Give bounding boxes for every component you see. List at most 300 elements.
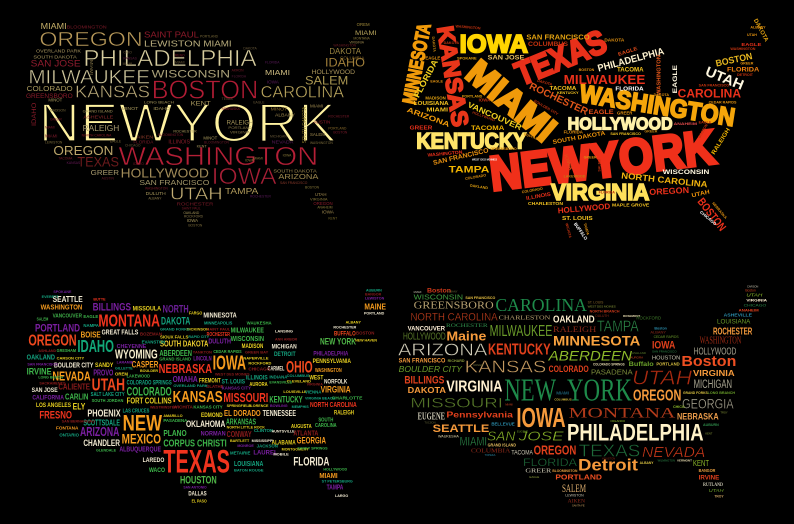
group: tiny filler words: NAMPA (83, 323, 100, 328)
group: tiny filler words: INDIANA (269, 375, 288, 380)
group: medium city words: UTAH (632, 368, 693, 390)
group: medium city words: TAMPA (597, 318, 639, 335)
group: tiny filler words: IDAHO (133, 162, 144, 166)
group: medium city words: COLORADO (127, 384, 172, 398)
group: medium city words: NORTH CAROLINA (621, 170, 709, 189)
group: tiny filler words: MIAMI (253, 156, 263, 160)
group: medium city words: Maine (446, 329, 486, 343)
group: medium city words: LAREDO (143, 457, 164, 464)
group: tiny filler words: SAN FRANCISCO (280, 181, 308, 185)
group: medium city words: WISCONSIN (152, 68, 230, 80)
group: medium city words: RALEIGH (553, 324, 596, 334)
group: medium city words: BANGOR (699, 468, 716, 473)
group: tiny filler words: WASHINGTON (333, 44, 357, 48)
group: medium city words: PENNSYLVANIA (313, 358, 351, 365)
group: medium city words: PHILADELPHIA (313, 351, 349, 357)
group: tiny filler words: KENT (328, 216, 337, 220)
group: medium city words: CARMEL (268, 366, 285, 372)
group: medium city words: ALABAMA (272, 440, 296, 447)
group: medium city words: MILWAUKEE (490, 323, 552, 340)
group: medium city words: MINNEAPOLIS (204, 320, 232, 325)
group: medium city words: EAGLE (589, 109, 614, 116)
group: medium city words: VIRGINIA (693, 368, 735, 378)
group: medium city words: EUGENE (418, 411, 445, 422)
group: tiny filler words: ONTARIO (59, 433, 80, 438)
group: tiny filler words: COLUMBUS (287, 373, 310, 378)
group: medium city words: SAN JOSE (488, 54, 525, 61)
group: tiny filler words: ROCKFORD (184, 215, 204, 219)
group: tiny filler words: BOZEMAN (140, 331, 162, 336)
group: tiny filler words: ROSEMONT (623, 314, 640, 318)
group: tiny filler words: SACRAMENTO (39, 382, 66, 386)
group: tiny filler words: MONROE (237, 444, 254, 448)
group: medium city words: ANAHEIM (674, 121, 698, 126)
group: medium city words: AUGUSTA (291, 424, 312, 430)
group: medium city words: UTAH (691, 190, 710, 199)
group: tiny filler words: MIAMI (45, 134, 58, 139)
group: medium city words: RUTLAND (703, 482, 723, 488)
group: tiny filler words: CHICO (673, 405, 685, 409)
group: medium city words: BUFFALO (573, 222, 589, 241)
group: medium city words: CARLIN (65, 391, 88, 401)
word: KANSAS: KANSAS (173, 389, 223, 406)
group: medium city words: EAGLE (617, 46, 639, 58)
word: ARIZONA: ARIZONA (398, 339, 488, 359)
group: medium city words: EAGLE (741, 42, 762, 48)
group: medium city words: TAMPA (449, 165, 490, 175)
group: medium city words: BOULDER CITY (54, 361, 93, 370)
word: IOWA: IOWA (213, 352, 246, 374)
group: medium city words: ALBUQUERQUE (119, 444, 161, 453)
group: medium city words: SOUTH (318, 417, 333, 423)
group: medium city words: FLORIDA (293, 454, 330, 468)
group: tiny filler words: COLUMBIA (340, 55, 365, 60)
group: tiny filler words: IOWA (479, 98, 491, 103)
group: tiny filler words: BOSTON (305, 185, 320, 189)
group: tiny filler words: SAINT PAUL (207, 326, 231, 331)
group: medium city words: TACOMA (511, 450, 533, 457)
group: tiny filler words: GRAND FORKS (683, 391, 709, 395)
group: medium city words: MADISON (242, 344, 263, 350)
group: tiny filler words: MONTGOMERY (282, 447, 309, 451)
group: medium city words: LOUISIANA (717, 319, 751, 326)
group: tiny filler words: WEST DES MOINES (588, 305, 616, 309)
group: tiny filler words: PORTLAND (200, 34, 219, 38)
group: medium city words: TROY (714, 494, 724, 499)
group: medium city words: FARGO (189, 310, 202, 316)
group: tiny filler words: OVERLAND PARK (173, 383, 208, 388)
group: tiny filler words: LONG BRANCH (708, 391, 735, 395)
group: tiny filler words: KANSAS CITY (193, 405, 223, 410)
group: tiny filler words: HUNTSVILLE (272, 430, 295, 434)
group: medium city words: MIAMI (310, 103, 323, 108)
group: medium city words: ANAHEIM (739, 307, 759, 312)
word: HOLLYWOOD: HOLLYWOOD (568, 113, 673, 133)
word: WASHINGTON: WASHINGTON (118, 141, 318, 171)
group: medium city words: ABERDEEN (548, 347, 633, 363)
group: medium city words: ILLINOIS (246, 374, 268, 381)
word: Detroit: Detroit (578, 455, 639, 474)
group: medium city words: RALEIGH (227, 120, 253, 126)
group: medium city words: DAKOTA (329, 47, 362, 56)
group: medium city words: FRESNO (39, 410, 72, 422)
group: medium city words: RALEIGH (83, 124, 120, 133)
group: tiny filler words: MIAMI (45, 125, 55, 129)
group: tiny filler words: BUFFALO (523, 132, 541, 142)
group: tiny filler words: OREGON (313, 201, 333, 206)
group: medium city words: GREER (91, 168, 119, 177)
group: tiny filler words: UTAH (747, 33, 757, 37)
group: medium city words: AIKEN (137, 134, 154, 140)
word: OREGON: OREGON (39, 28, 143, 51)
group: medium city words: MIAMI (41, 22, 67, 31)
group: medium city words: CHANDLER (83, 438, 120, 448)
word: OREGON: OREGON (28, 332, 77, 349)
group: tiny filler words: MISSISSIPPI (252, 439, 273, 443)
group: tiny filler words: CHARLOTTE (332, 395, 363, 401)
group: medium city words: DAKOTA (408, 385, 447, 395)
group: tiny filler words: SAN FRANCISCO (699, 84, 729, 88)
group: medium city words: TAMPA (327, 482, 344, 491)
group: tiny filler words: VIRGINIA (310, 197, 328, 202)
group: tiny filler words: VERMONT (677, 458, 692, 462)
group: tiny filler words: ALBANY (650, 330, 666, 335)
group: medium city words: IOWA (652, 340, 675, 352)
group: medium city words: WISCONSIN (663, 169, 710, 176)
group: tiny filler words: NEBRASKA (222, 107, 241, 111)
group: medium city words: NORMAN (201, 430, 226, 437)
group: tiny filler words: MIAMI (505, 402, 513, 406)
group: medium city words: DULUTH (208, 337, 231, 346)
group: medium city words: GREER (525, 469, 551, 475)
group: medium city words: Buffalo (629, 362, 654, 368)
group: medium city words: KENTUCKY (557, 91, 579, 95)
group: medium city words: LAS CRUCES (123, 409, 150, 415)
group: medium city words: VANCOUVER (408, 325, 445, 332)
group: medium city words: SCOTTSDALE (83, 417, 120, 427)
word: NEW YORK (504, 372, 632, 407)
group: medium city words: MAINE (364, 302, 386, 312)
group: medium city words: PHILADELPHIA (597, 46, 665, 75)
group: medium city words: MIAMI (89, 60, 94, 75)
group: medium city words: DAKOTA (604, 38, 625, 43)
group: medium city words: ARKANSAS (226, 418, 256, 427)
group: tiny filler words: BLOOMINGTON (158, 133, 184, 137)
group: medium city words: MIAMI (460, 434, 487, 448)
group: medium city words: FLORIDA (133, 139, 154, 145)
group: tiny filler words (45, 22, 371, 228)
group: medium city words: ATLANTA (293, 428, 319, 437)
group: medium city words: TACOMA (471, 125, 505, 132)
group: medium city words: SALT LAKE CITY (91, 392, 125, 398)
word: KANSAS: KANSAS (432, 24, 474, 129)
group: tiny filler words: KANSAS CITY (222, 385, 251, 390)
group: medium city words: WEST (309, 374, 323, 381)
group: tiny filler words: RENO (175, 54, 185, 58)
word: PHILADELPHIA: PHILADELPHIA (83, 45, 257, 71)
group: medium city words: ILLINOIS (526, 192, 552, 202)
group: medium city words: OREGON (633, 387, 681, 404)
group: tiny filler words: GREER (617, 110, 633, 115)
group: medium city words: KENT (197, 145, 207, 149)
group: tiny filler words: LARGO (335, 494, 348, 498)
group: medium city words: SAN FRANCISCO (526, 32, 590, 41)
group: medium city words: ABERDEEN (159, 348, 192, 358)
group: medium city words: BILLINGS (404, 375, 444, 387)
group: medium city words: TACOMA (550, 86, 576, 92)
group: tiny filler words: ANAHEIM (317, 205, 333, 209)
group: medium city words: WASHINGTON (315, 368, 342, 374)
group: medium city words: OAKLAND (553, 315, 595, 326)
word: WASHINGTON: WASHINGTON (578, 80, 737, 132)
group: tiny filler words: METAIRIE (230, 451, 250, 456)
group: medium city words: ARIZONA (406, 105, 452, 129)
group: medium city words: WASHINGTON (427, 150, 463, 158)
group: medium city words: NORFOLK (324, 379, 347, 386)
word: NEW YORK: NEWYORK (487, 120, 718, 202)
group: tiny filler words: IOWA (187, 218, 198, 223)
group: tiny filler words: SAN FRANCISCO (27, 362, 58, 366)
group: tiny filler words: HOLLYWOOD (323, 467, 348, 471)
group: tiny filler words: OREM (115, 371, 128, 376)
group: tiny filler words: DAKOTA (431, 36, 436, 52)
group: tiny filler words: HOUSTON (602, 456, 615, 460)
group: tiny filler words: SANDY SPRINGS (297, 446, 328, 450)
group: tiny filler words: BOSTON (356, 331, 374, 336)
group: medium city words: UTAH (746, 293, 763, 298)
group: tiny filler words: HOLLYWOOD (472, 111, 496, 123)
group: tiny filler words: IOWA (267, 79, 280, 84)
group: tiny filler words: DAKOTA (243, 46, 258, 50)
word: KANSAS: KANSAS (465, 357, 546, 377)
word: PHILADELPHIA: PHILADELPHIA (567, 419, 704, 446)
group: medium city words: NORTH CAROLINA (410, 311, 498, 323)
group: tiny filler words: BOSTON (333, 130, 348, 134)
group: medium city words: OMAHA (173, 375, 198, 384)
word: NEW MEXICO (122, 410, 162, 447)
group: tiny filler words: TROY (720, 411, 728, 415)
group: medium city words: GEORGIA (682, 396, 734, 412)
word: Boston: Boston (681, 354, 736, 370)
group: medium city words: ROCHESTER (173, 129, 197, 133)
group: medium city words: VIRGINIA (321, 385, 351, 395)
group: tiny filler words: WASHINGTON (730, 47, 756, 51)
group: medium city words: ILLINOIS (168, 139, 190, 145)
group: medium city words: MINNESOTA (203, 311, 237, 320)
group: medium city words: RALEIGH (334, 410, 354, 417)
group: tiny filler words: MEMPHIS (292, 405, 309, 409)
group: medium city words: EL DORADO (224, 408, 261, 418)
word: VIRGINIA: VIRGINIA (551, 179, 649, 205)
group: medium city words: SOUTH DAKOTA (273, 169, 317, 175)
word: MIAMI: MIAMI (459, 52, 564, 150)
panel: multicolour condensed word map, bottom left (27, 288, 386, 504)
group: tiny filler words: TOPEKA (485, 453, 496, 457)
group: tiny filler words: BUTTE (93, 297, 106, 301)
group: medium city words: SOUTH DAKOTA (33, 54, 78, 59)
group: medium city words: BOULDER CITY (399, 365, 463, 374)
group: medium city words: Pennsylvania (446, 410, 513, 420)
word: IOWA: IOWA (212, 163, 278, 189)
group: medium city words: SAN ANTONIO (183, 485, 207, 490)
group: medium city words: GRAND ISLAND (159, 356, 192, 361)
panel: mixed typeface green, orange and red word map, bottom right (398, 284, 767, 508)
group: medium city words: HOLLYWOOD (121, 165, 209, 180)
group: tiny filler words: DAKOTA (654, 93, 669, 97)
word: NEW YORK: NEWYORK (38, 92, 337, 154)
group: tiny filler words: JACKSON (257, 444, 278, 449)
group: medium city words: ST. LOUIS (222, 379, 245, 386)
group: medium city words: WISCONSIN (414, 292, 463, 301)
group: tiny filler words: ST. LOUIS (588, 301, 604, 305)
group: tiny filler words: GILLETTE (115, 366, 133, 370)
group: tiny filler words: WASHINGTON (455, 24, 481, 31)
group: medium city words: VANCOUVER (466, 100, 523, 132)
group: tiny filler words: ASHLAND (38, 349, 57, 353)
group: medium city words: DULUTH (146, 191, 166, 196)
group: tiny filler words: EUGENE (517, 430, 528, 434)
group: tiny filler words: MIAMI (414, 290, 422, 294)
group: tiny filler words: KANSAS (67, 161, 81, 165)
group: medium city words: TAMPA (225, 186, 259, 196)
word: NEW MEXICO: MEXICO (122, 431, 161, 447)
group: tiny filler words: SAN BERNARDINO (62, 420, 95, 424)
group: medium city words: BELLEVUE (491, 421, 515, 427)
group: medium city words: DETROIT (274, 351, 296, 358)
group: medium city words: SALEM (305, 73, 348, 87)
group: medium city words: MINOT (271, 107, 287, 112)
group: medium city words: OAKLAND (27, 353, 55, 362)
group: medium city words: WASHINGTON (41, 303, 82, 312)
group: tiny filler words: WAUKESHA (438, 435, 459, 439)
group: tiny filler words: CHEYENNE (117, 344, 147, 350)
group: tiny filler words: BATON ROUGE (234, 467, 264, 472)
group: tiny filler words: BANGOR (365, 292, 382, 296)
group: tiny filler words: COLUMBUS (554, 397, 572, 401)
group: tiny filler words: PORTLAND (364, 311, 385, 315)
group: medium city words: ARIZONA (80, 425, 119, 439)
group: medium city words: BOSTON (715, 51, 753, 69)
group: medium city words: WASHINGTON (700, 336, 741, 347)
group: tiny filler words: EAGLE (425, 55, 440, 60)
group: tiny filler words: NORTH CAROLINA (82, 134, 112, 138)
group: tiny filler words: AUBURN (703, 423, 719, 427)
group: medium city words: ASHEVILLE (724, 312, 752, 317)
group: tiny filler words: EAGLE (699, 120, 712, 124)
group: tiny filler words: WICHITA (564, 223, 572, 239)
group: medium city words: VANCOUVER (53, 314, 82, 320)
group: medium city words: FLORIDA (615, 87, 644, 93)
group: medium city words: KENTUCKY (269, 395, 303, 405)
group: medium city words: CHARLESTON (499, 314, 551, 321)
group: tiny filler words: VIRGINIA BEACH (305, 396, 335, 400)
group: tiny filler words: ALBANY (346, 321, 361, 325)
group: tiny filler words: OLATHE (206, 384, 224, 389)
group: medium city words: CHICAGO (744, 302, 766, 307)
group: tiny filler words: TEXAS (222, 97, 233, 101)
group: medium city words (399, 289, 767, 505)
group: medium city words: MIAMI (319, 471, 338, 480)
group: tiny filler words: MOBILE (273, 451, 289, 456)
group: medium city words (27, 294, 386, 504)
group: tiny filler words: DICKINSON (187, 326, 209, 331)
group: medium city words: LEWISTON (565, 493, 584, 498)
group: tiny filler words: LARAMIE (117, 361, 134, 365)
group: tiny filler words: ROCHESTER (333, 326, 357, 330)
group: tiny filler words: SPRINGFIELD (227, 404, 252, 408)
word: MINNESOTA: MINNESOTA (553, 332, 640, 348)
group: medium city words: ROCHESTER (713, 327, 752, 338)
group: tiny filler words: TAMPA (583, 223, 590, 236)
group: medium city words: COLUMBUS (528, 42, 568, 48)
group: tiny filler words: EVANSVILLE (269, 381, 293, 385)
group: tiny filler words: ALBANY (148, 196, 162, 200)
group: tiny filler words: MINOT (48, 98, 63, 103)
group: medium city words: RALEIGH (711, 127, 732, 156)
group: medium city words: GREENSBORO (26, 93, 73, 100)
group: medium city words: GREENSBORO (414, 301, 494, 312)
group: tiny filler words: UTAH (315, 192, 326, 197)
group: tiny filler words: GREER (740, 61, 754, 65)
group: tiny filler words: FLORENCE (248, 404, 269, 408)
group: tiny filler words: TACOMA (58, 156, 73, 160)
group: tiny filler words: MIAMI (556, 391, 569, 396)
group: medium city words: LOUISIANA (234, 459, 264, 468)
group: tiny filler words: ORLANDO (610, 419, 626, 423)
group: medium city words: PORTLAND (656, 361, 680, 367)
group: tiny filler words: FONTANA (56, 426, 79, 431)
group: medium city words: ASHEVILLE (83, 114, 114, 120)
group: medium city words: CALIFORNIA (32, 394, 64, 401)
group: medium city words: JOSE (517, 428, 565, 443)
group: medium city words: CONWAY (227, 430, 252, 439)
group: tiny filler words: WEST DES MOINES (472, 158, 497, 162)
panel: thin gold and red word map, top left (26, 22, 377, 228)
group: medium city words: WASHINGTON (656, 55, 662, 95)
group: tiny filler words: KENT (705, 431, 713, 435)
group: tiny filler words: VIENNA (305, 390, 322, 395)
group: tiny filler words: DAKOTA (537, 79, 553, 87)
group: medium city words: LAKEWOOD (127, 374, 150, 380)
group: medium city words: GRAND ISLAND (83, 109, 113, 113)
group: medium city words: ST. LOUIS (562, 216, 593, 222)
word: TEXAS: TEXAS (510, 24, 612, 93)
panel: heavy red, orange and yellow word map, top right (400, 18, 769, 241)
group: medium city words (406, 18, 769, 241)
group: tiny filler words: GRAND FORKS (160, 326, 190, 331)
group: medium city words: COLORADO (27, 84, 73, 93)
group: medium city words: DALLAS (188, 491, 207, 497)
group: medium city words: MAPLE GROVE (612, 203, 650, 209)
group: tiny filler words: ALBANY (447, 290, 458, 294)
group: medium city words: OHIO (286, 358, 313, 377)
group: medium city words: TACOMA (617, 68, 644, 74)
group: medium city words: MISSOURI (410, 395, 503, 411)
group: medium city words: LOS ANGELES (36, 402, 71, 409)
group: tiny filler words: SALEM (597, 159, 601, 172)
group: medium city words: NEBRASKA (677, 411, 719, 421)
group: tiny filler words: BOWLING (270, 404, 288, 408)
group: medium city words: OREGON (53, 143, 113, 158)
group: tiny filler words: WASHINGTON (310, 141, 333, 145)
group: tiny filler words: VIRGINIA (307, 382, 323, 386)
word: NEW YORK: YORK (567, 372, 632, 407)
group: tiny filler words: BOSTON (579, 68, 595, 72)
group: medium city words: MONTANA (569, 406, 676, 422)
group: tiny filler words: COLORADO (465, 173, 487, 181)
word: IOWA: IOWA (516, 402, 566, 433)
group: tiny filler words: VIRGINIA (349, 40, 365, 44)
